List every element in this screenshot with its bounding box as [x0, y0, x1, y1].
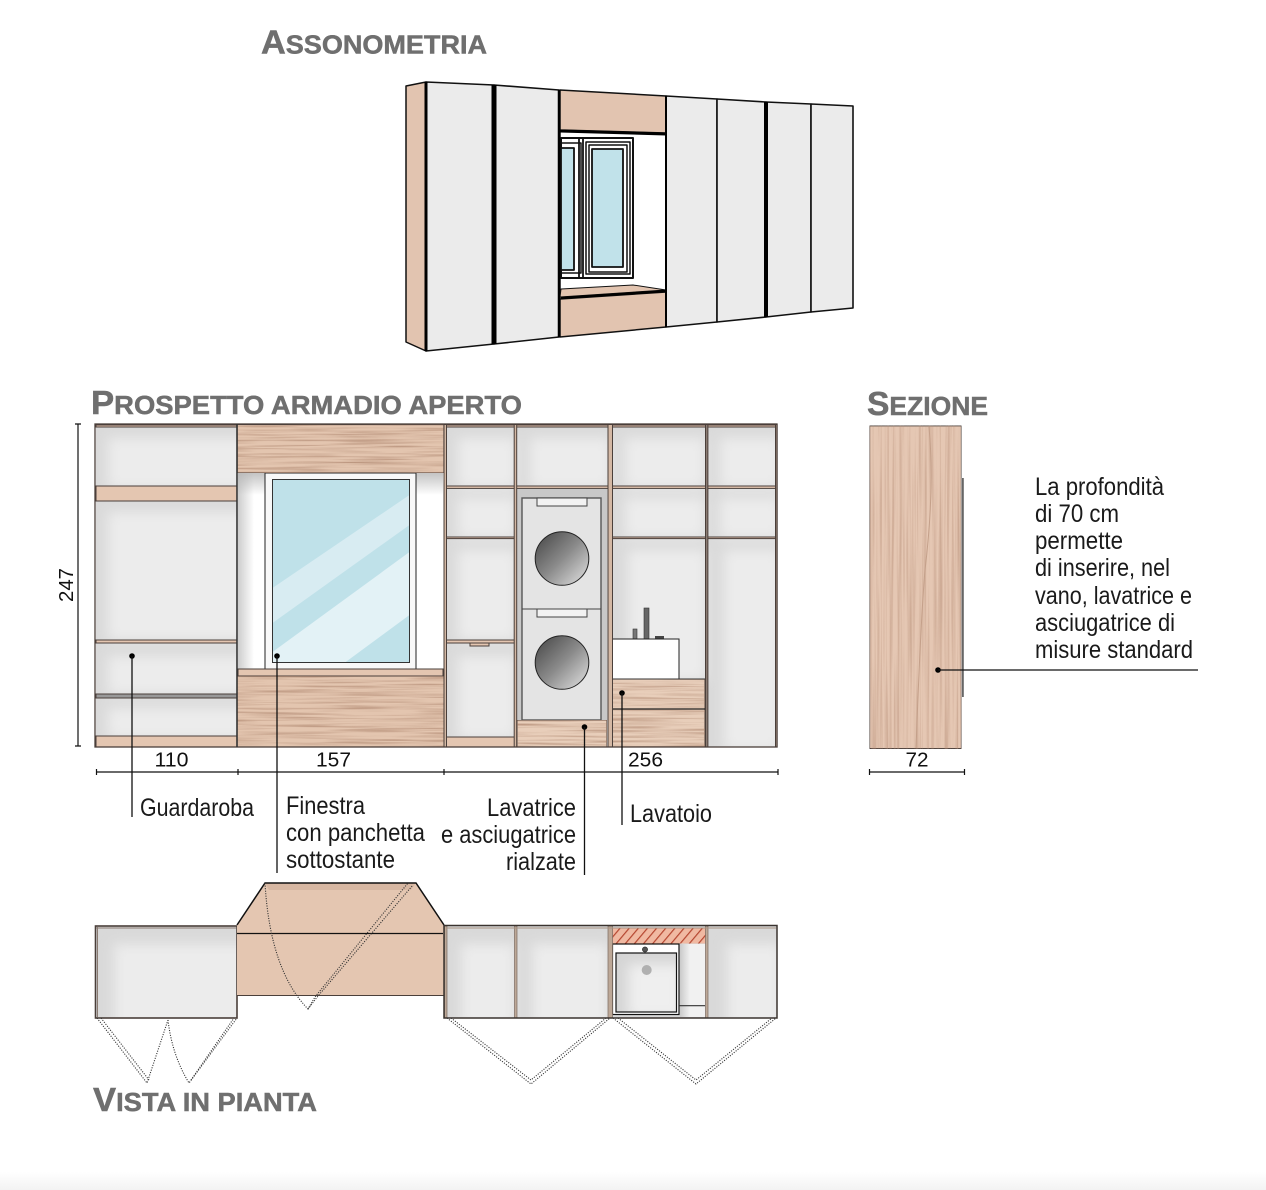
wood panel above window — [560, 90, 666, 133]
title: Assonometria: ASSONOMETRIA — [261, 24, 487, 60]
drum: upper — [535, 532, 589, 585]
side panel — [406, 82, 426, 351]
right wardrobe section — [444, 424, 780, 750]
plan: laundry sink — [612, 944, 682, 1018]
open wardrobe elevation — [95, 424, 780, 750]
callout: section depth note: asciugatrice di — [1035, 609, 1175, 637]
window recess — [560, 130, 666, 300]
callout: Finestra con panchetta sottostante: sottostante — [286, 846, 395, 874]
callout: section depth note — [935, 473, 1198, 673]
plan: right door swing — [447, 1018, 776, 1084]
stacked washer and dryer — [517, 489, 607, 747]
plan: window recess and bench — [237, 883, 444, 996]
title: Prospetto armadio aperto: PROSPETTO ARMADIO APERTO — [91, 384, 522, 421]
callout: section depth note: di 70 cm — [1035, 500, 1119, 528]
plan: right units — [444, 926, 781, 1028]
callout: Lavatrice e asciugatrice rialzate: rialzate — [506, 848, 576, 876]
dimension: depth 72: 72 — [906, 750, 928, 772]
plan: window swing — [265, 883, 413, 1009]
callout: Guardaroba: Guardaroba — [140, 794, 254, 822]
upper wood panel — [237, 424, 444, 473]
plan: hatched wall section — [612, 928, 706, 944]
callout: section depth note: vano, lavatrice e — [1035, 582, 1192, 610]
window glass with reflections — [272, 480, 410, 662]
callout: Lavatoio — [619, 690, 712, 828]
callout: section depth note: misure standard — [1035, 636, 1193, 664]
callout: Lavatrice e asciugatrice rialzate — [441, 724, 587, 876]
thick door gaps — [492, 85, 496, 344]
door panels — [426, 82, 853, 351]
dimension: depth 72 — [870, 750, 964, 775]
dimension: height 247 — [56, 424, 81, 746]
raised base — [517, 720, 607, 747]
dimension: height 247: 247 — [56, 568, 78, 602]
callout: Finestra con panchetta sottostante — [274, 653, 425, 874]
callout: Guardaroba — [129, 653, 254, 822]
door profile — [962, 478, 964, 697]
callout: Lavatrice e asciugatrice rialzate: e asciugatrice — [441, 821, 576, 849]
callout: Lavatoio: Lavatoio — [630, 800, 712, 828]
axonometric view of the wardrobe — [406, 82, 853, 351]
callout: Lavatrice e asciugatrice rialzate: Lavatrice — [487, 794, 576, 822]
outer frame — [95, 424, 777, 747]
lower wood panel: bench — [237, 676, 444, 747]
plan: left door swing — [97, 1018, 237, 1083]
title: Vista in pianta: VISTA IN PIANTA — [93, 1081, 317, 1118]
title: Sezione: SEZIONE — [867, 385, 988, 422]
plan: left unit — [94, 925, 238, 1019]
section view — [870, 426, 964, 749]
dimension: widths 110, 157, 256 — [96, 750, 778, 775]
laundry sink and cabinet — [612, 608, 705, 747]
callout: section depth note: permette — [1035, 527, 1123, 555]
window section — [237, 424, 444, 747]
left wardrobe section — [96, 425, 248, 747]
dimension: widths 110, 157, 256: 110 — [154, 750, 188, 772]
wood bench below window — [560, 292, 666, 337]
callout: Finestra con panchetta sottostante: con panchetta — [286, 819, 425, 847]
vertical partitions — [444, 424, 777, 747]
drum: lower — [535, 636, 589, 689]
callout: Finestra con panchetta sottostante: Finestra — [286, 792, 365, 820]
plan view — [96, 883, 781, 1084]
dimension: widths 110, 157, 256: 256 — [628, 750, 663, 772]
window sill — [238, 669, 443, 676]
callout: section depth note: La profondità — [1035, 473, 1164, 501]
callout: section depth note: di inserire, nel — [1035, 554, 1170, 582]
shelves — [446, 425, 777, 747]
dimension: widths 110, 157, 256: 157 — [316, 750, 351, 772]
shelf: wood band — [96, 486, 237, 501]
